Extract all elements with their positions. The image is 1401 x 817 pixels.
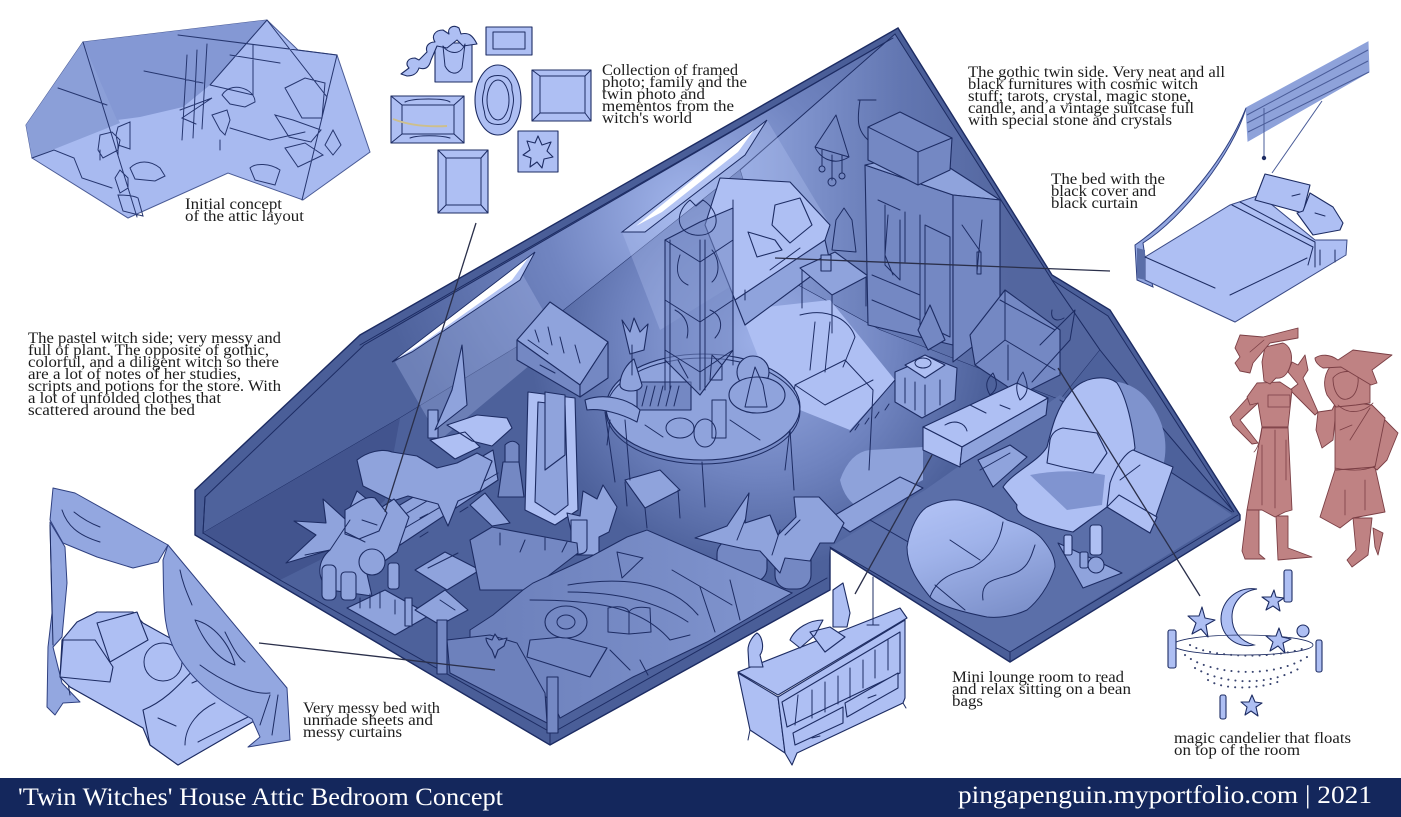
small potted plants center: [567, 485, 617, 555]
bean bag: [907, 500, 1055, 617]
star frame: [518, 131, 558, 172]
stacked books: [978, 445, 1027, 487]
caption: candelier: on top of the room: [1174, 742, 1300, 759]
framed photo collection: [391, 26, 591, 213]
window right: [622, 120, 767, 232]
witch left: [1230, 328, 1318, 560]
oval frame: [475, 65, 521, 135]
right frame: [532, 70, 591, 121]
caption: gothic twin: black furnitures with cosmic witch: [968, 76, 1198, 93]
caption: framed photos: photo; family and the: [602, 74, 747, 91]
caption: framed photos: mementos from the: [602, 98, 734, 115]
illustration: messy canopy bed: [47, 488, 290, 765]
caption: pastel witch: full of plant. The opposite of gothic,: [28, 342, 269, 359]
standing mirror: [525, 392, 578, 525]
round table: [606, 354, 800, 507]
caption: framed photos: Collection of framed: [602, 62, 738, 79]
plants right: [695, 493, 844, 589]
stairs bench on right wall: [970, 290, 1075, 395]
leader lines: [259, 223, 1200, 670]
caption: messy bed: Very messy bed with: [303, 700, 440, 717]
tall frame: [438, 150, 488, 213]
caption: initial concept: Initial concept: [185, 196, 283, 213]
plant frame: [401, 26, 477, 82]
caption: messy bed: unmade sheets and: [303, 712, 433, 729]
sparkle dots: [1185, 645, 1310, 688]
wide frame: [391, 96, 464, 143]
notes rug: [470, 527, 578, 590]
caption: gothic twin: candle, and a vintage suitcase full: [968, 100, 1194, 117]
banner title: 'Twin Witches' House Attic Bedroom Concept: [18, 784, 503, 811]
back bed: [705, 178, 830, 325]
lounge: bean chair: [1003, 378, 1173, 533]
right drape: [163, 545, 290, 747]
window left: [392, 252, 535, 362]
banner credit: pingapenguin.myportfolio.com | 2021: [958, 782, 1372, 809]
panel: attic cutaway room: [195, 28, 1240, 745]
side table with candles: [923, 345, 1048, 467]
foreground bed: [437, 530, 792, 733]
caption: gothic twin: stuff; tarots, crystal, magic stone,: [968, 88, 1191, 105]
lantern: [498, 441, 524, 497]
light beams from windows: [395, 120, 830, 440]
right lounge floor: [830, 395, 1232, 652]
caption: pastel witch: are a lot of notes of her studies,: [28, 366, 241, 383]
caption: pastel witch: a lot of unfolded clothes that: [28, 390, 222, 407]
top drape: [50, 488, 168, 568]
wardrobe with suitcase: [865, 112, 1000, 362]
record player: [895, 305, 957, 418]
illustration: vintage dresser: [738, 577, 907, 765]
caption: pastel witch: colorful, and a diligent witch so there: [28, 354, 279, 371]
drawer dresser with clothes: [357, 345, 512, 547]
caption: pastel witch: scripts and potions for the store. With: [28, 378, 281, 395]
wall hanging mobile: [815, 100, 876, 186]
room floor: [203, 170, 1232, 733]
left chair: [585, 397, 680, 528]
caption: pastel witch: The pastel witch side; very messy and: [28, 330, 281, 347]
floor and wall lines: [195, 38, 1238, 745]
caption: lounge: Mini lounge room to read: [952, 669, 1124, 686]
caption: lounge: bags: [952, 693, 983, 710]
caption: initial concept: of the attic layout: [185, 208, 305, 225]
left roof slope: [203, 38, 893, 533]
candles and stars: [1168, 570, 1322, 719]
lounge: chair halo: [1063, 381, 1165, 500]
tall shelf with plants: [665, 200, 733, 395]
caption: messy bed: messy curtains: [303, 724, 402, 741]
initial concept sketch: [26, 20, 370, 218]
illustration: bed with black curtain: [1135, 42, 1369, 322]
illustration: twin witches: [1230, 328, 1398, 567]
back gable wall: [740, 34, 1100, 400]
desk: [517, 302, 608, 397]
caption: gothic twin: with special stone and crystals: [968, 112, 1172, 129]
dark left floor: [203, 418, 400, 580]
left drape: [47, 522, 80, 715]
illustration: magic candelier: [1168, 570, 1322, 719]
room shell: [195, 28, 1240, 745]
caption: black bed: The bed with the: [1051, 171, 1165, 188]
caption: black bed: black cover and: [1051, 183, 1156, 200]
caption: candelier: magic candelier that floats: [1174, 730, 1351, 747]
small lounge table: [1058, 525, 1122, 588]
caption: black bed: black curtain: [1051, 195, 1138, 212]
caption: framed photos: witch's world: [602, 110, 692, 127]
rug fringe and right chair: [785, 313, 895, 470]
light floor patch: [740, 300, 923, 532]
caption: lounge: and relax sitting on a bean: [952, 681, 1131, 698]
bed: [60, 612, 270, 765]
caption: gothic twin: The gothic twin side. Very neat and all: [968, 64, 1225, 81]
right side wall edge: [1052, 280, 1234, 512]
night stand: [800, 208, 868, 333]
caption: pastel witch: scattered around the bed: [28, 402, 195, 419]
caption: framed photos: twin photo and: [602, 86, 705, 103]
witch right: [1315, 345, 1398, 567]
footer banner: [0, 778, 1401, 817]
potted flower: [620, 318, 648, 391]
small frame top: [486, 27, 532, 55]
plants left: [286, 491, 409, 600]
potion tray and books: [347, 552, 480, 635]
